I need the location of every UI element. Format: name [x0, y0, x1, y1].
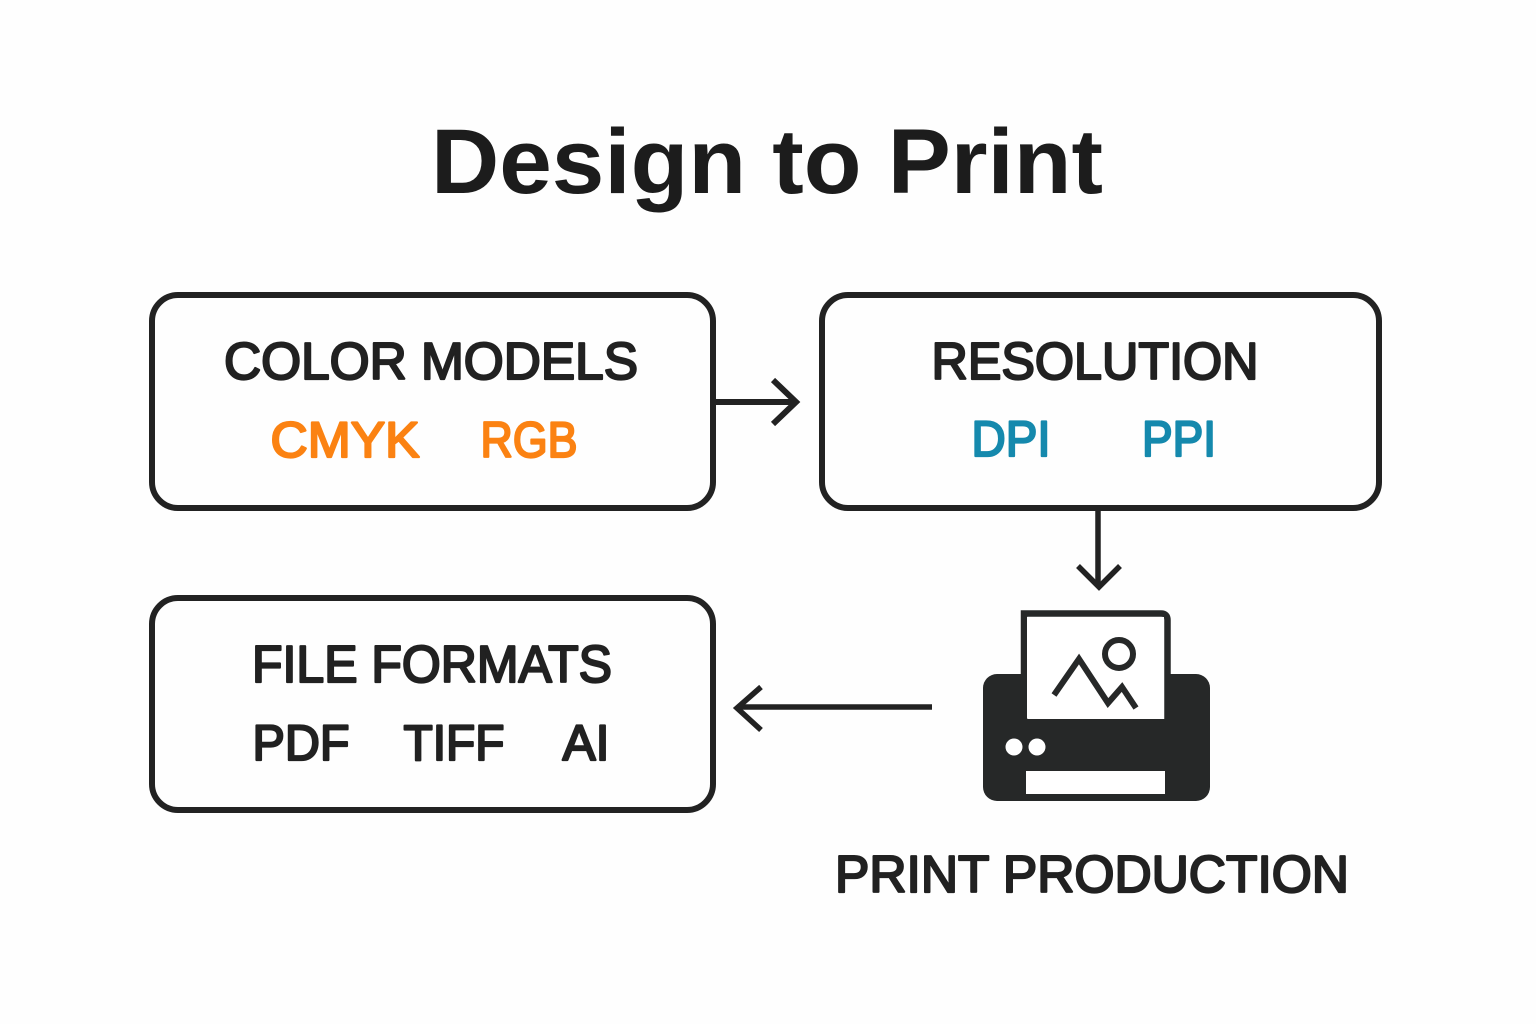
heading: file formats: FILE FORMATS: [252, 636, 612, 694]
label: DPI: DPI: [972, 411, 1050, 467]
arrow: print production to file formats: [737, 687, 932, 730]
icon: printer: [983, 614, 1210, 801]
title: Design to Print: [431, 111, 1103, 213]
label: PPI: PPI: [1142, 411, 1216, 467]
panel: resolution: [822, 295, 1379, 508]
panel: color models: [152, 295, 713, 508]
panel: file formats: [152, 598, 713, 810]
label: TIFF: TIFF: [404, 715, 504, 771]
label: CMYK: CMYK: [270, 412, 420, 468]
label: AI: AI: [562, 715, 610, 771]
arrow: resolution to print production: [1078, 510, 1120, 587]
heading: color models: COLOR MODELS: [224, 333, 638, 391]
label: print production: PRINT PRODUCTION: [835, 846, 1349, 904]
heading: resolution: RESOLUTION: [932, 333, 1258, 391]
arrow: color models to resolution: [716, 380, 796, 424]
label: RGB: RGB: [480, 412, 578, 468]
label: PDF: PDF: [252, 715, 350, 771]
